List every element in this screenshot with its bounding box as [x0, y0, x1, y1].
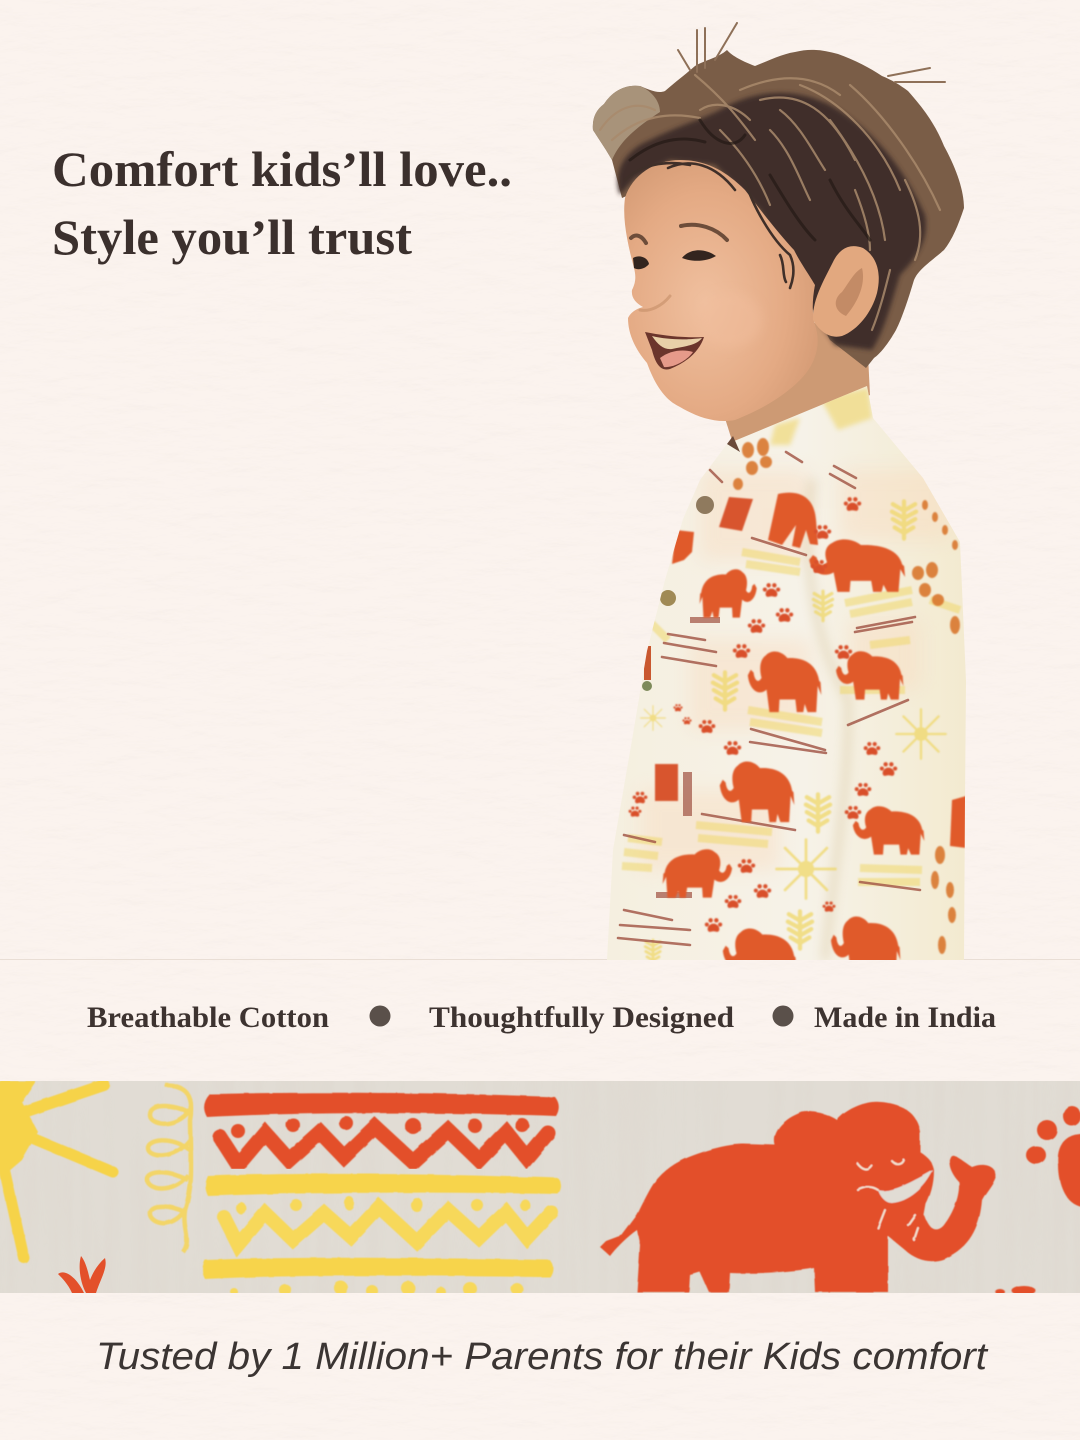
fringe strands — [625, 163, 793, 288]
red band and zigzag — [204, 1093, 559, 1165]
rust rectangles and small marks — [655, 497, 753, 801]
yellow bands and zigzag — [202, 1174, 561, 1297]
rust lines — [618, 452, 920, 945]
smile — [645, 332, 704, 370]
kurta shirt — [600, 380, 970, 986]
face — [624, 160, 818, 421]
feature: thoughtfully designed: Thoughtfully Designed — [429, 1001, 734, 1034]
yellow motifs — [622, 501, 960, 964]
neck — [723, 320, 870, 450]
paw prints — [629, 497, 897, 932]
elephants — [663, 493, 966, 986]
bullet dot — [772, 1006, 794, 1026]
title: Style you’ll trust — [52, 209, 412, 265]
seed clusters — [733, 438, 960, 954]
yellow spiral motif — [147, 1085, 191, 1252]
hair dark mass — [618, 93, 926, 350]
peach tint patches — [640, 470, 950, 870]
tagline: Tusted by 1 Million+ Parents for their Kids comfort — [96, 1336, 989, 1378]
photo: laughing boy in elephant print kurta — [593, 23, 970, 986]
red paw print — [995, 1106, 1080, 1296]
ear — [813, 246, 879, 337]
hair highlights — [600, 75, 940, 330]
eyes and brows — [631, 225, 727, 269]
title — [52, 141, 512, 265]
yellow collar patch — [770, 388, 872, 445]
red sprout — [58, 1256, 106, 1293]
shadow at sleeve seam — [808, 480, 848, 960]
feature: made in india: Made in India — [814, 1001, 996, 1034]
title: Comfort kids’ll love.. — [52, 141, 512, 197]
feature: breathable cotton: Breathable Cotton — [87, 1001, 329, 1034]
yellow sun motif — [0, 1081, 113, 1258]
collar shadow — [727, 436, 740, 452]
nose shadow and cheek — [640, 292, 762, 348]
bullet dot — [370, 1006, 390, 1026]
large red elephant — [600, 1102, 996, 1292]
features row — [87, 1001, 996, 1034]
fabric print strip — [0, 1081, 1080, 1297]
hair back — [593, 23, 964, 368]
buttons — [642, 496, 714, 691]
